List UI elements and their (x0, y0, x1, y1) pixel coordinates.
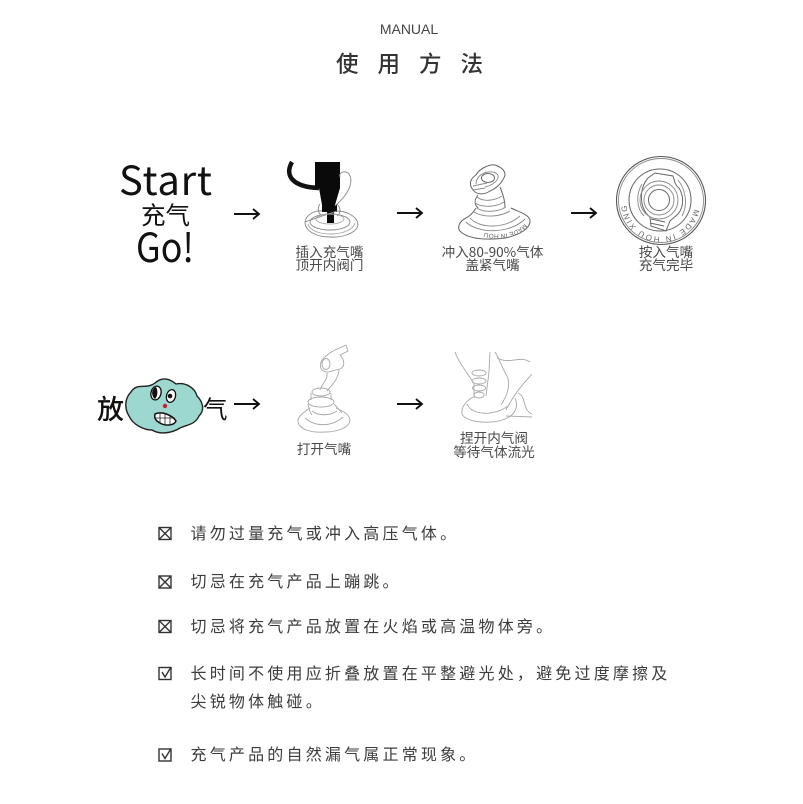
icon: Start Go logo: Start (119, 149, 212, 207)
caption: open valve: 打开气嘴 (297, 438, 352, 458)
caption: squeeze valve: 等待气体流光 (453, 441, 535, 461)
icon: deflate logo (97, 379, 228, 433)
caption: step 1: 顶开内阀门 (296, 254, 363, 274)
caption: step 3: 按入气嘴 (639, 241, 694, 261)
caption: step 2: 冲入80-90%气体 (442, 241, 544, 261)
caption: step 3 (639, 241, 694, 274)
note 4 (159, 660, 671, 712)
icon: Start Go logo (119, 149, 212, 274)
note 2: 切忌在充气产品上蹦跳。 (190, 568, 402, 592)
arrow (234, 399, 259, 409)
heading: title: 使用方法 (336, 47, 502, 79)
icon: valve from above (616, 156, 706, 245)
arrow (571, 208, 596, 218)
caption: step 2 (442, 241, 544, 274)
arrow (234, 209, 259, 219)
note 3: 切忌将充气产品放置在火焰或高温物体旁。 (190, 613, 555, 637)
caption: step 1 (296, 241, 364, 274)
icon: deflate logo: 放 (97, 388, 124, 427)
icon: Start Go logo: Go! (136, 216, 194, 274)
arrow (397, 208, 422, 218)
icon: closed valve (458, 164, 531, 240)
heading: MANUAL: MANUAL (380, 21, 438, 37)
caption: step 3: 充气完毕 (639, 254, 693, 274)
caption: squeeze valve: 捏开内气阀 (460, 427, 528, 447)
icon: open valve (298, 345, 350, 432)
icon: deflate logo: 气 (203, 391, 228, 426)
caption: step 1: 插入充气嘴 (296, 241, 364, 261)
notes list (159, 520, 671, 765)
arrow (397, 399, 422, 409)
icon: pump nozzle inserted in valve (289, 162, 358, 237)
icon: Start Go logo: 充气 (141, 197, 190, 232)
caption: squeeze valve (453, 427, 535, 461)
note 5: 充气产品的自然漏气属正常现象。 (190, 741, 479, 765)
icon: closed valve: MADE IN HOU (484, 224, 528, 239)
caption: step 2: 盖紧气嘴 (465, 254, 520, 274)
icon: valve from above: MADE IN HOU XING (622, 206, 700, 242)
icon: squeezing valve by hand (455, 352, 532, 422)
note 4: 长时间不使用应折叠放置在平整避光处，避免过度摩擦及 (190, 660, 671, 684)
note 4: 尖锐物体触碰。 (190, 688, 325, 712)
note 1: 请勿过量充气或冲入高压气体。 (190, 520, 459, 544)
